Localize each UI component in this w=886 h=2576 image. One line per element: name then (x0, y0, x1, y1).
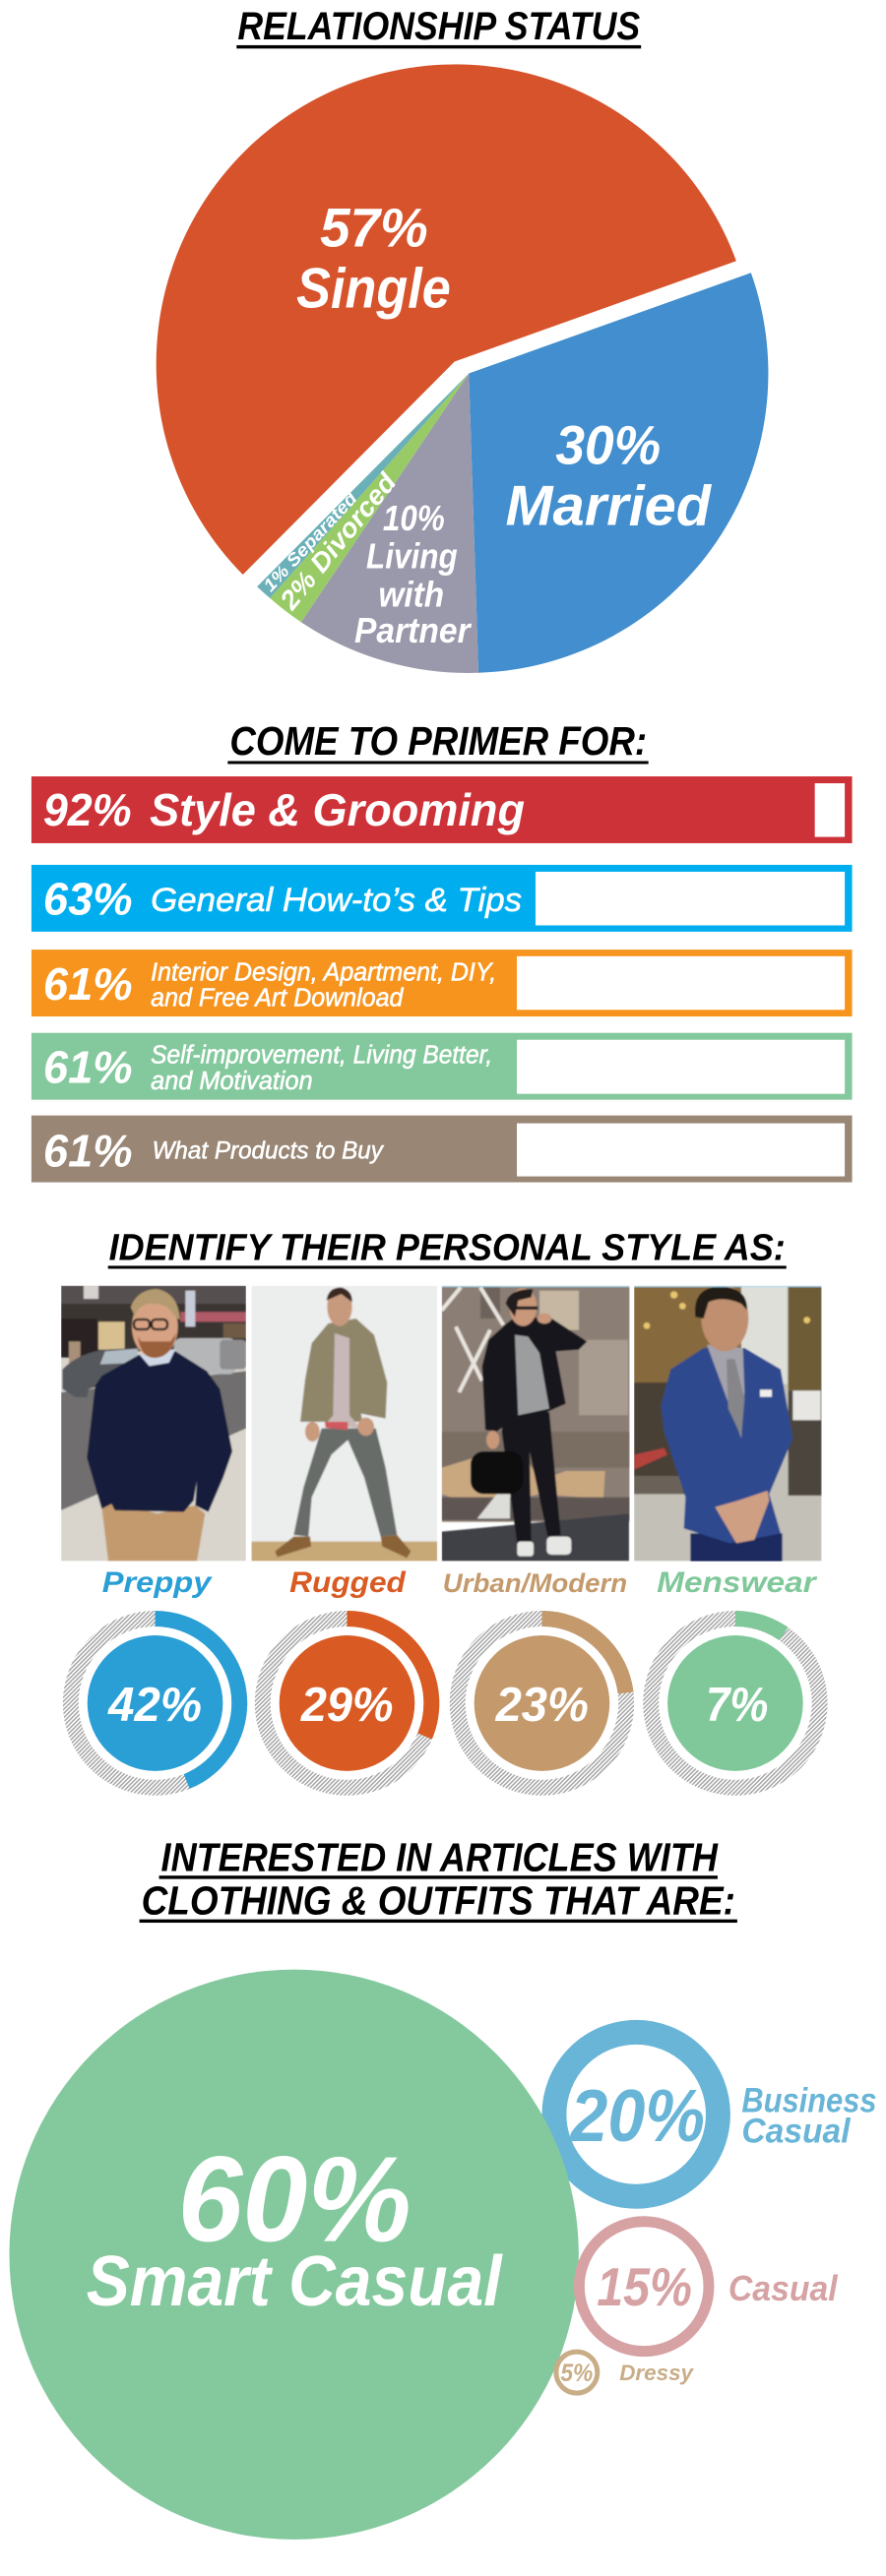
heading: interested in articles: INTERESTED IN ARTICLES WITH (161, 1834, 719, 1879)
heading: personal style: IDENTIFY THEIR PERSONAL STYLE AS: (109, 1227, 786, 1268)
ring: dressy 5% (556, 2352, 695, 2393)
panel: come to primer for (32, 718, 853, 1183)
label: 10% living with partner: Partner (354, 610, 473, 650)
bar: general how-to's and tips 63% (32, 865, 853, 932)
donut: urban/modern 23%: 23% (495, 1679, 589, 1732)
ring: business casual 20% (554, 2032, 876, 2196)
ring: casual 15%: 15% (597, 2256, 692, 2317)
style label: urban/modern: Urban/Modern (443, 1568, 627, 1598)
ring: business casual 20%: Casual (741, 2112, 852, 2150)
heading: relationship status: RELATIONSHIP STATUS (237, 5, 641, 48)
bar: interior design 61% (32, 950, 853, 1016)
label: 10% living with partner (354, 498, 473, 650)
photo: preppy man in navy sweater (61, 1286, 246, 1562)
circle: smart casual 60%: 60% (177, 2131, 411, 2267)
bar: interior design 61%: and Free Art Download (151, 984, 405, 1012)
donut: menswear 7% (651, 1619, 820, 1788)
bar: style and grooming 92% (32, 776, 853, 843)
label: 57% single (296, 197, 451, 321)
heading: come to primer for: COME TO PRIMER FOR: (229, 718, 647, 764)
slice: divorced 2% (270, 374, 469, 622)
ring: business casual 20%: 20% (569, 2074, 705, 2157)
donut: rugged 29%: 29% (300, 1679, 394, 1732)
label: 2% divorced: 2% Divorced (274, 467, 403, 616)
bar: what products to buy 61% (32, 1116, 853, 1183)
circle: smart casual 60%: Smart Casual (87, 2242, 503, 2321)
ring: dressy 5%: Dressy (619, 2361, 695, 2385)
pie chart (157, 64, 768, 673)
photo: urban man in black jacket (442, 1286, 630, 1562)
bar: general how-to's and tips 63%: 63% (43, 873, 133, 924)
heading: interested in articles (140, 1834, 737, 1923)
label: 10% living with partner: with (378, 574, 444, 614)
bar: what products to buy 61%: What Products to Buy (153, 1137, 384, 1165)
ring: casual 15%: Casual (728, 2268, 839, 2308)
style label: preppy: Preppy (102, 1566, 213, 1599)
style label: rugged: Rugged (289, 1566, 407, 1599)
bar: what products to buy 61%: 61% (43, 1126, 133, 1177)
donut: rugged 29% (263, 1619, 431, 1788)
donut charts (71, 1619, 820, 1788)
slice: married 30% (469, 273, 768, 673)
ring: dressy 5%: 5% (560, 2360, 593, 2387)
panel: relationship status (157, 5, 768, 673)
bar: interior design 61%: Interior Design, Apartment, DIY, (151, 958, 496, 986)
slice: living with partner 10% (301, 374, 478, 673)
bar: self-improvement 61%: 61% (43, 1042, 133, 1093)
style label: menswear: Menswear (657, 1566, 818, 1599)
donut: preppy 42%: 42% (107, 1679, 202, 1732)
panel: clothing and outfits interest (9, 1834, 876, 2540)
label: 57% single: Single (296, 258, 451, 321)
heading: interested in articles: CLOTHING & OUTFITS THAT ARE: (142, 1877, 735, 1923)
donut: urban/modern 23% (458, 1619, 626, 1788)
panel: personal style (61, 1227, 822, 1788)
style labels (102, 1566, 818, 1599)
bar: style and grooming 92%: 92% (43, 784, 132, 835)
bar: style and grooming 92%: Style & Grooming (150, 784, 525, 835)
bar: general how-to's and tips 63%: General How-to’s & Tips (151, 882, 522, 919)
ring: casual 15% (579, 2222, 839, 2352)
donut: preppy 42% (71, 1619, 239, 1788)
circle: smart casual 60% (9, 1970, 579, 2540)
label: 30% married (506, 413, 713, 537)
slice: single 57% (157, 64, 736, 575)
bar: self-improvement 61%: and Motivation (151, 1068, 313, 1095)
label: 30% married: Married (506, 474, 713, 537)
bar: self-improvement 61% (32, 1033, 853, 1100)
bar: self-improvement 61%: Self-improvement, Living Better, (151, 1042, 492, 1070)
label: 57% single: 57% (320, 197, 428, 259)
photo: menswear man in blue suit (634, 1286, 822, 1563)
bar: interior design 61%: 61% (43, 958, 133, 1010)
label: 30% married: 30% (555, 413, 661, 475)
label: 10% living with partner: 10% (383, 498, 445, 538)
label: 1% separated: 1% Separated (260, 488, 361, 595)
slice: separated 1% (257, 374, 469, 598)
donut: menswear 7%: 7% (706, 1679, 768, 1732)
label: 10% living with partner: Living (366, 535, 458, 576)
photo: rugged man in olive jacket (251, 1286, 437, 1562)
